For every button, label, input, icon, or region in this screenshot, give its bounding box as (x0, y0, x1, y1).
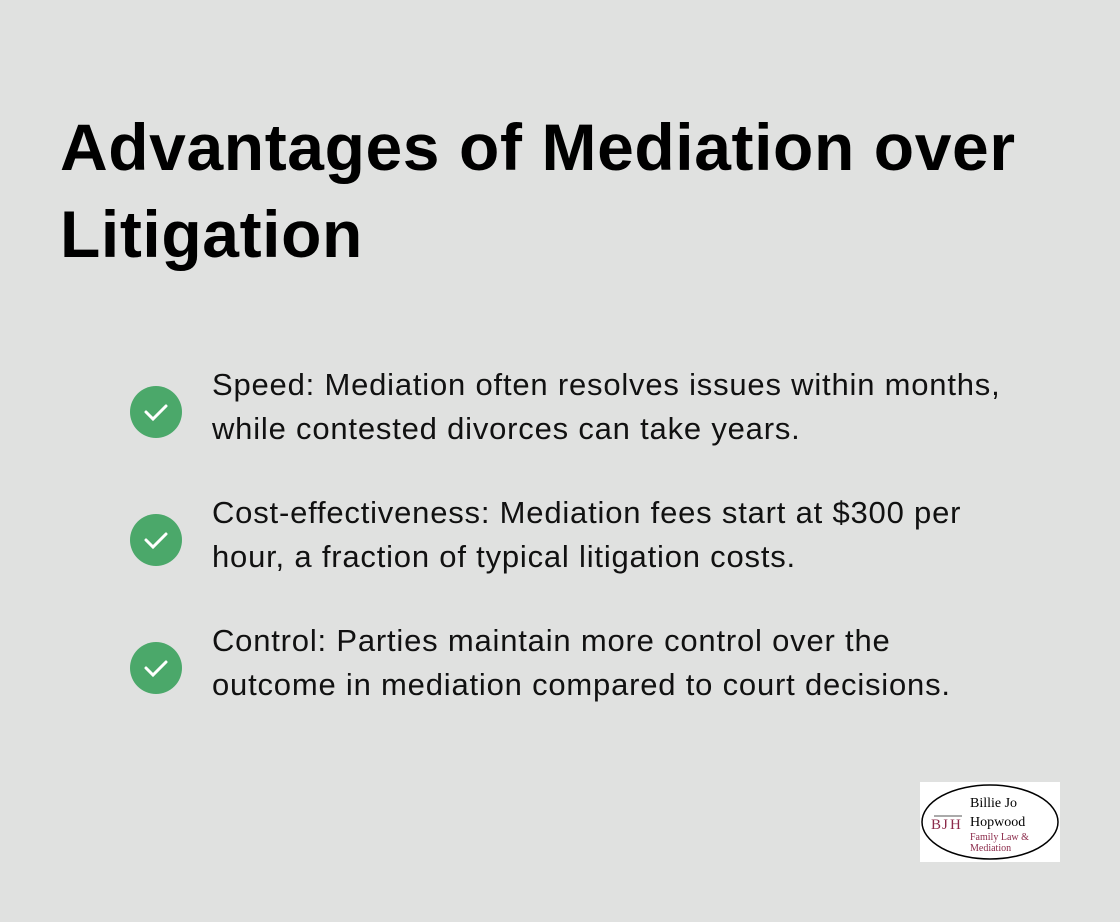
icon: check (130, 642, 182, 694)
text: control: Control: Parties maintain more control over the outcome in mediation compared to court decisions. (212, 623, 951, 702)
icon: check (130, 386, 182, 438)
logo: B (931, 817, 941, 833)
text: speed: Speed: Mediation often resolves issues within months, while contested divorces can take years. (212, 367, 1001, 446)
item: control (130, 623, 951, 702)
logo: J (942, 817, 948, 833)
title: Advantages of Mediation over Litigation (60, 110, 1016, 271)
logo (920, 782, 1060, 862)
logo: Billie Jo (970, 796, 1017, 811)
logo: H (950, 817, 961, 833)
icon: check (130, 514, 182, 566)
logo: Mediation (970, 843, 1011, 854)
item: speed (130, 367, 1001, 446)
logo: Family Law & (970, 832, 1029, 843)
text: cost: Cost-effectiveness: Mediation fees start at $300 per hour, a fraction of typical litigation costs. (212, 495, 961, 574)
item: cost (130, 495, 961, 574)
logo: Hopwood (970, 815, 1025, 830)
